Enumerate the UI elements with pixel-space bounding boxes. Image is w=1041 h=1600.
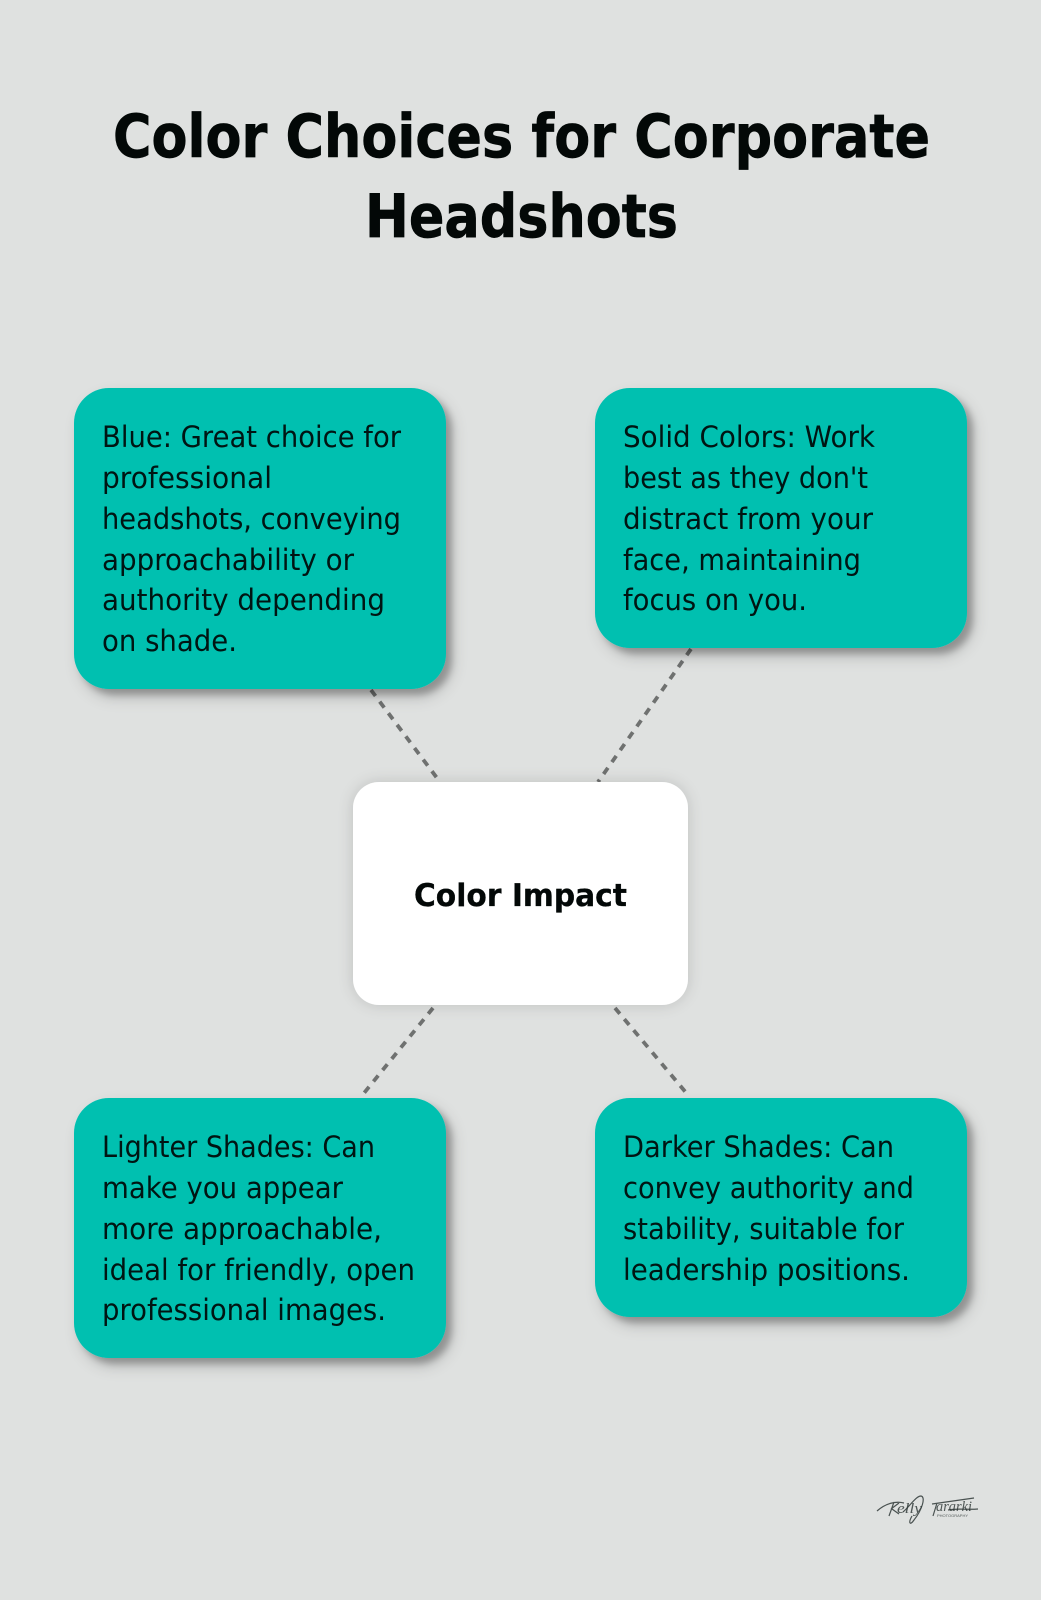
panel: solid colors: best as they don't (623, 461, 868, 495)
panel: blue: approachability or (102, 543, 355, 577)
panel: darker shades: stability, suitable for (623, 1212, 905, 1246)
panel: blue: Blue: Great choice for (102, 420, 402, 454)
panel: darker shades (595, 1098, 967, 1317)
connector: lighter shades to center (360, 1008, 433, 1098)
logo: signature: elly (897, 1501, 922, 1517)
panel: blue: on shade. (102, 624, 237, 658)
panel: lighter shades (74, 1098, 446, 1358)
panel: color impact center (353, 782, 688, 1005)
panel: solid colors: Solid Colors: Work (623, 420, 875, 454)
connector: solid colors to center (598, 649, 691, 782)
panel: blue (74, 388, 446, 689)
title (113, 102, 930, 252)
logo: signature (877, 1496, 978, 1523)
panel: darker shades: convey authority and (623, 1171, 914, 1205)
panel: blue: authority depending (102, 583, 385, 617)
panel: blue: professional (102, 461, 272, 495)
logo: signature: PHOTOGRAPHY (937, 1514, 969, 1518)
panel: lighter shades: make you appear (102, 1171, 344, 1205)
title: Color Choices for Corporate (113, 102, 930, 172)
panel: solid colors (595, 388, 967, 648)
connector: darker shades to center (615, 1008, 688, 1095)
panel: lighter shades: professional images. (102, 1293, 386, 1327)
panel: darker shades: leadership positions. (623, 1253, 910, 1287)
panel: solid colors: face, maintaining (623, 543, 861, 577)
panel: solid colors: focus on you. (623, 583, 807, 617)
panel: solid colors: distract from your (623, 502, 874, 536)
panel: lighter shades: ideal for friendly, open (102, 1253, 415, 1287)
panel: blue: headshots, conveying (102, 502, 401, 536)
panel: lighter shades: more approachable, (102, 1212, 382, 1246)
panel: lighter shades: Lighter Shades: Can (102, 1130, 375, 1164)
panel: darker shades: Darker Shades: Can (623, 1130, 894, 1164)
connector: blue to center (371, 690, 440, 782)
title: Headshots (365, 182, 678, 252)
logo: signature: ararki (936, 1499, 972, 1515)
panel: color impact center: Color Impact (414, 878, 627, 914)
